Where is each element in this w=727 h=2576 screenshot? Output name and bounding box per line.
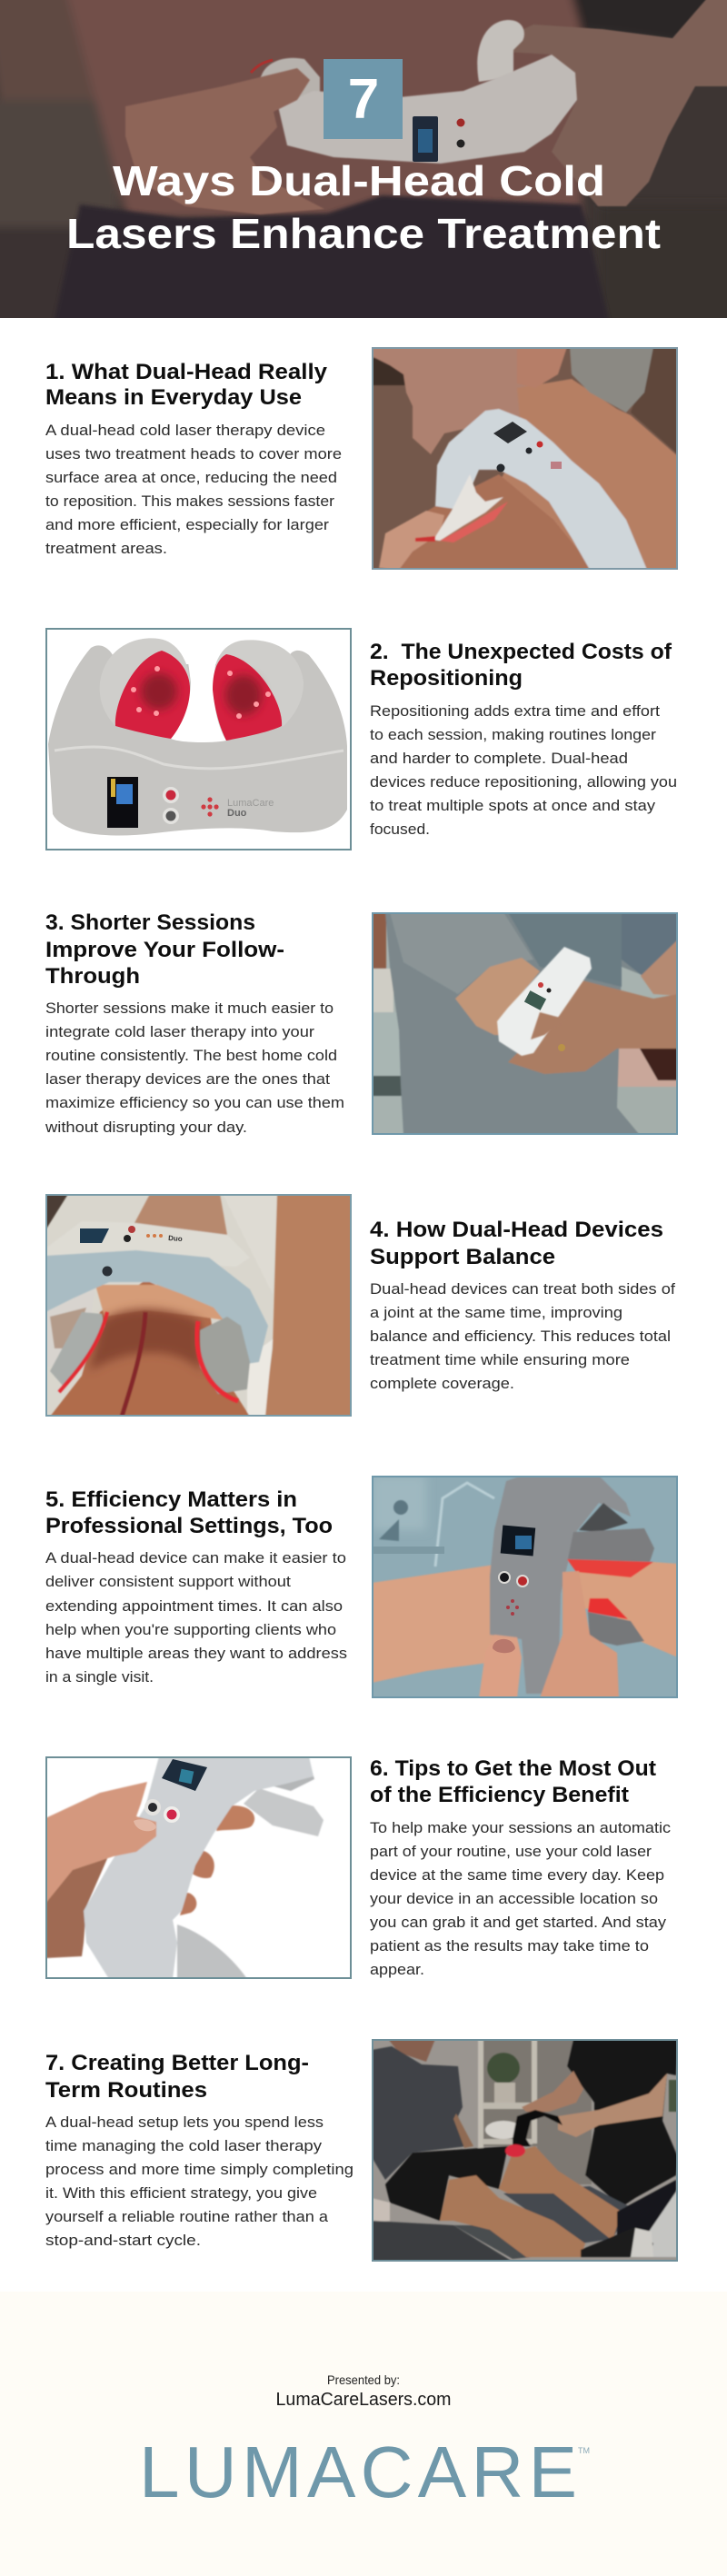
number badge [324,59,403,139]
shoes [617,2180,676,2239]
body text 7: process and more time simply completing [45,2162,354,2178]
patient arm [453,2114,473,2148]
body text 3: Shorter sessions make it much easier to [45,1000,334,1017]
body text 2: focused. [370,821,430,838]
brand mark [201,797,219,817]
body text 4: Dual-head devices can treat both sides of [370,1281,675,1298]
heading 2: 2. The Unexpected Costs of [370,640,672,664]
heading 7: Term Routines [45,2078,207,2103]
body text 7 [45,2114,354,2249]
body text 3: without disrupting your day. [45,1119,247,1136]
header photo: hands holding device on back [0,0,727,318]
body text 6: part of your routine, use your cold laser [370,1844,652,1860]
upper dark piece [579,1503,628,1532]
photo 3: device on elbow [372,912,678,1135]
title: Lasers Enhance Treatment [66,210,661,257]
device body [84,1756,314,1979]
heading 6 [370,1756,656,1807]
right leg [264,1194,352,1417]
treatment head [433,474,503,541]
body text 6: your device in an accessible location so [370,1891,658,1907]
photo 4: device around knee: Duo [168,1234,183,1243]
left hand [125,68,324,214]
body text 4: complete coverage. [370,1376,514,1392]
heading 3: 3. Shorter Sessions [45,910,255,935]
logo: LumaCare: TM [578,2446,590,2455]
device body [278,55,577,164]
heading 1: Means in Everyday Use [45,385,302,410]
photo 2: dual-head device: LumaCare [227,798,274,809]
palm shadow [45,1855,109,1958]
panel: section 4 [45,1194,675,1417]
body text 6 [370,1820,671,1978]
body text 1: and more efficient, especially for larger [45,517,330,533]
buttons [163,787,179,803]
device [497,947,592,1056]
heading 7 [45,2051,309,2103]
body text 1: to reposition. This makes sessions faster [45,493,335,510]
heading 4: Support Balance [370,1245,555,1269]
right arm [576,1562,678,1657]
therapist arms [522,2071,583,2112]
front hand [45,1782,156,1904]
panel: section 1 [45,347,678,570]
right hand and arm [503,0,727,206]
red laser edge [240,125,253,152]
hair [570,347,653,413]
head [568,1528,654,1562]
title: Ways Dual-Head Cold [113,157,605,204]
photo 5: device on arm, teal background [372,1476,678,1698]
body text 5 [45,1550,347,1686]
panel: section 3 [45,910,678,1136]
shorts [385,2146,508,2221]
heading 4 [370,1218,663,1269]
patient torso [372,2046,467,2180]
photo 1: device on neck [372,347,678,570]
heading 3: Through [45,964,140,989]
knee [50,1280,250,1417]
heading 3 [45,910,284,989]
device top panel [45,1221,250,1267]
photo 4: device around knee [45,1194,352,1417]
photo 7: therapist treating knee [372,2039,678,2262]
hand [508,980,678,1074]
body text 2: to each session, making routines longer [370,727,657,743]
neck [388,2039,435,2062]
white sheets bottom right [247,1339,273,1417]
body text 6: appear. [370,1962,424,1978]
body text 4 [370,1281,675,1392]
ear [517,347,567,388]
body text 2: to treat multiple spots at once and stay [370,798,656,814]
body text 5: in a single visit. [45,1669,154,1686]
body text 4: balance and efficiency. This reduces total [370,1328,671,1345]
back fingers [216,1805,254,1831]
therapist [567,2039,678,2207]
left arm [372,1565,494,1683]
upper leg [499,2146,622,2241]
device head [244,1788,324,1836]
photo 2: dual-head device: Duo [227,808,247,819]
body text 2: devices reduce repositioning, allowing you [370,774,677,791]
heading 2 [370,640,672,691]
red lens left [115,651,190,739]
body text 7: yourself a reliable routine rather than a [45,2209,329,2225]
heading 5 [45,1487,333,1538]
device left head [260,58,320,109]
body text 5: have multiple areas they want to address [45,1646,347,1662]
body text 5: extending appointment times. It can also [45,1598,343,1615]
body text 2 [370,703,677,838]
body text 7: stop-and-start cycle. [45,2233,201,2249]
footer [0,2292,727,2576]
device arch [45,1250,268,1365]
body text 3: integrate cold laser therapy into your [45,1024,315,1040]
laser glow [59,1312,107,1392]
body text 2: and harder to complete. Dual-head [370,751,628,767]
shorts [53,195,611,327]
body text 4: treatment time while ensuring more [370,1352,630,1368]
red lens right [213,654,282,741]
body text 6: you can grab it and get started. And stay [370,1915,667,1931]
forearm [455,958,540,1035]
device upper head [477,20,524,82]
heading 3: Improve Your Follow- [45,938,284,962]
photo 2: dual-head device [45,628,352,850]
panel: section 2 [45,628,677,850]
body text 1: treatment areas. [45,541,167,557]
left head [50,1312,105,1387]
body text 4: a joint at the same time, improving [370,1305,622,1321]
body text 1: surface area at once, reducing the need [45,470,337,486]
bed [372,2221,513,2262]
body text 5: A dual-head device can make it easier to [45,1550,346,1566]
body text 6: patient as the results may take time to [370,1938,649,1954]
shirt [385,912,678,1135]
body text 3: maximize efficiency so you can use them [45,1095,344,1111]
website: LumaCareLasers.com [276,2390,451,2410]
face [372,347,531,454]
panel: section 7 [45,2039,678,2262]
body text 6: To help make your sessions an automatic [370,1820,671,1836]
heading 6: of the Efficiency Benefit [370,1783,629,1807]
screen [107,777,138,828]
body text 7: it. With this efficient strategy, you give [45,2185,317,2202]
heading 6: 6. Tips to Get the Most Out [370,1756,656,1781]
number badge: 7 [348,68,379,131]
heading 2: Repositioning [370,666,523,691]
body text 5: help when you're supporting clients who [45,1622,336,1638]
body text 2: Repositioning adds extra time and effort [370,703,660,720]
photo 6: hand holding device [45,1756,352,1979]
header banner [0,0,727,332]
right head [200,1317,250,1394]
left remains [45,1285,95,1367]
panel: section 5 [45,1476,678,1698]
title [66,157,661,257]
body text 1: uses two treatment heads to cover more [45,446,342,462]
body text 3 [45,1000,344,1136]
heading 7: 7. Creating Better Long- [45,2051,309,2075]
hand [379,511,444,570]
bevel [55,747,344,769]
neck and back [499,379,678,570]
body text 1 [45,423,342,557]
heading 4: 4. How Dual-Head Devices [370,1218,663,1242]
right upper arm [641,940,678,996]
body text 5: deliver consistent support without [45,1574,291,1590]
heading 5: 5. Efficiency Matters in [45,1487,297,1512]
device [513,2110,563,2146]
heading 1 [45,360,328,410]
gap between heads [171,628,226,742]
body text 6: device at the same time every day. Keep [370,1867,664,1884]
body text 7: A dual-head setup lets you spend less [45,2114,324,2131]
presented by: Presented by: [327,2372,400,2387]
lower loop [177,1925,247,1979]
body text 7: time managing the cold laser therapy [45,2138,323,2154]
device [490,1476,631,1694]
panel: section 6 [45,1756,671,1979]
body text 3: routine consistently. The best home cold [45,1048,337,1064]
device arch [435,409,647,570]
device body [48,645,347,835]
body text 1: A dual-head cold laser therapy device [45,423,325,439]
pillow [503,2186,631,2243]
heading 1: 1. What Dual-Head Really [45,360,328,384]
fingers [479,1635,522,1698]
heading 5: Professional Settings, Too [45,1514,333,1538]
body text 3: laser therapy devices are the ones that [45,1071,330,1088]
logo: LumaCare: LUMACARE [139,2432,577,2512]
lower leg [440,2175,585,2257]
